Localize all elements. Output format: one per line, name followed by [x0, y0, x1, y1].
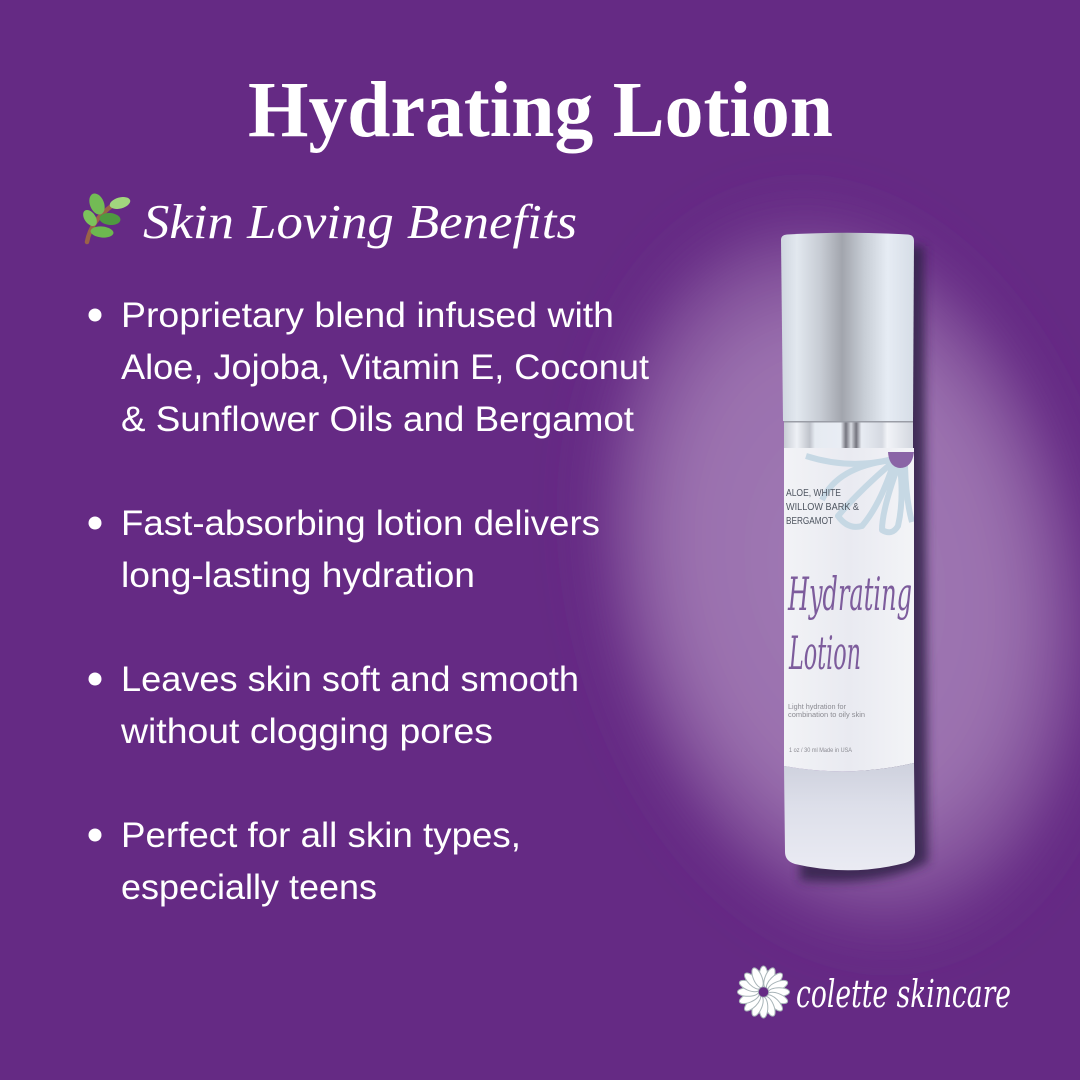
benefit 3: Leaves skin soft and smooth	[121, 660, 579, 699]
label ingredients text: BERGAMOT	[786, 515, 833, 527]
benefit 4	[88, 816, 521, 907]
bottle shadow	[800, 246, 928, 882]
bottle base	[784, 763, 915, 870]
benefit 1	[88, 296, 649, 439]
benefit 3: without clogging pores	[120, 712, 493, 751]
label small print: 1 oz / 30 ml Made in USA	[789, 748, 852, 754]
benefit 4: Perfect for all skin types,	[121, 816, 521, 855]
label ingredients text: ALOE, WHITE	[786, 487, 841, 499]
label product name	[787, 567, 912, 680]
label ingredients text	[786, 487, 859, 527]
label flower graphic	[806, 456, 912, 532]
subheading: Skin Loving Benefits	[143, 194, 577, 249]
benefit 2: Fast-absorbing lotion delivers	[121, 504, 600, 543]
logo	[738, 966, 1011, 1018]
title: Hydrating Lotion	[248, 67, 833, 154]
label ingredients text: WILLOW BARK &	[786, 501, 859, 513]
label small print: combination to oily skin	[788, 710, 865, 719]
bullet list	[88, 296, 649, 907]
benefit 1: Aloe, Jojoba, Vitamin E, Coconut	[121, 348, 649, 387]
benefit 1: & Sunflower Oils and Bergamot	[121, 400, 634, 439]
product bottle	[781, 233, 928, 882]
benefit 4: especially teens	[121, 868, 377, 907]
cap	[781, 233, 914, 421]
label small print: Light hydration for	[788, 702, 846, 711]
background glow behind bottle	[504, 134, 1080, 1016]
benefit 2	[88, 504, 600, 595]
label	[784, 448, 914, 771]
silver collar	[784, 421, 913, 448]
benefit 2: long-lasting hydration	[121, 556, 475, 595]
benefit 1: Proprietary blend infused with	[121, 296, 614, 335]
label product name: Hydrating	[787, 567, 912, 621]
label flower centre	[888, 452, 914, 468]
icon: herb sprig	[80, 191, 132, 242]
label product name: Lotion	[789, 626, 861, 680]
logo flower	[738, 966, 790, 1018]
label small print	[788, 702, 865, 754]
benefit 3	[88, 660, 579, 751]
